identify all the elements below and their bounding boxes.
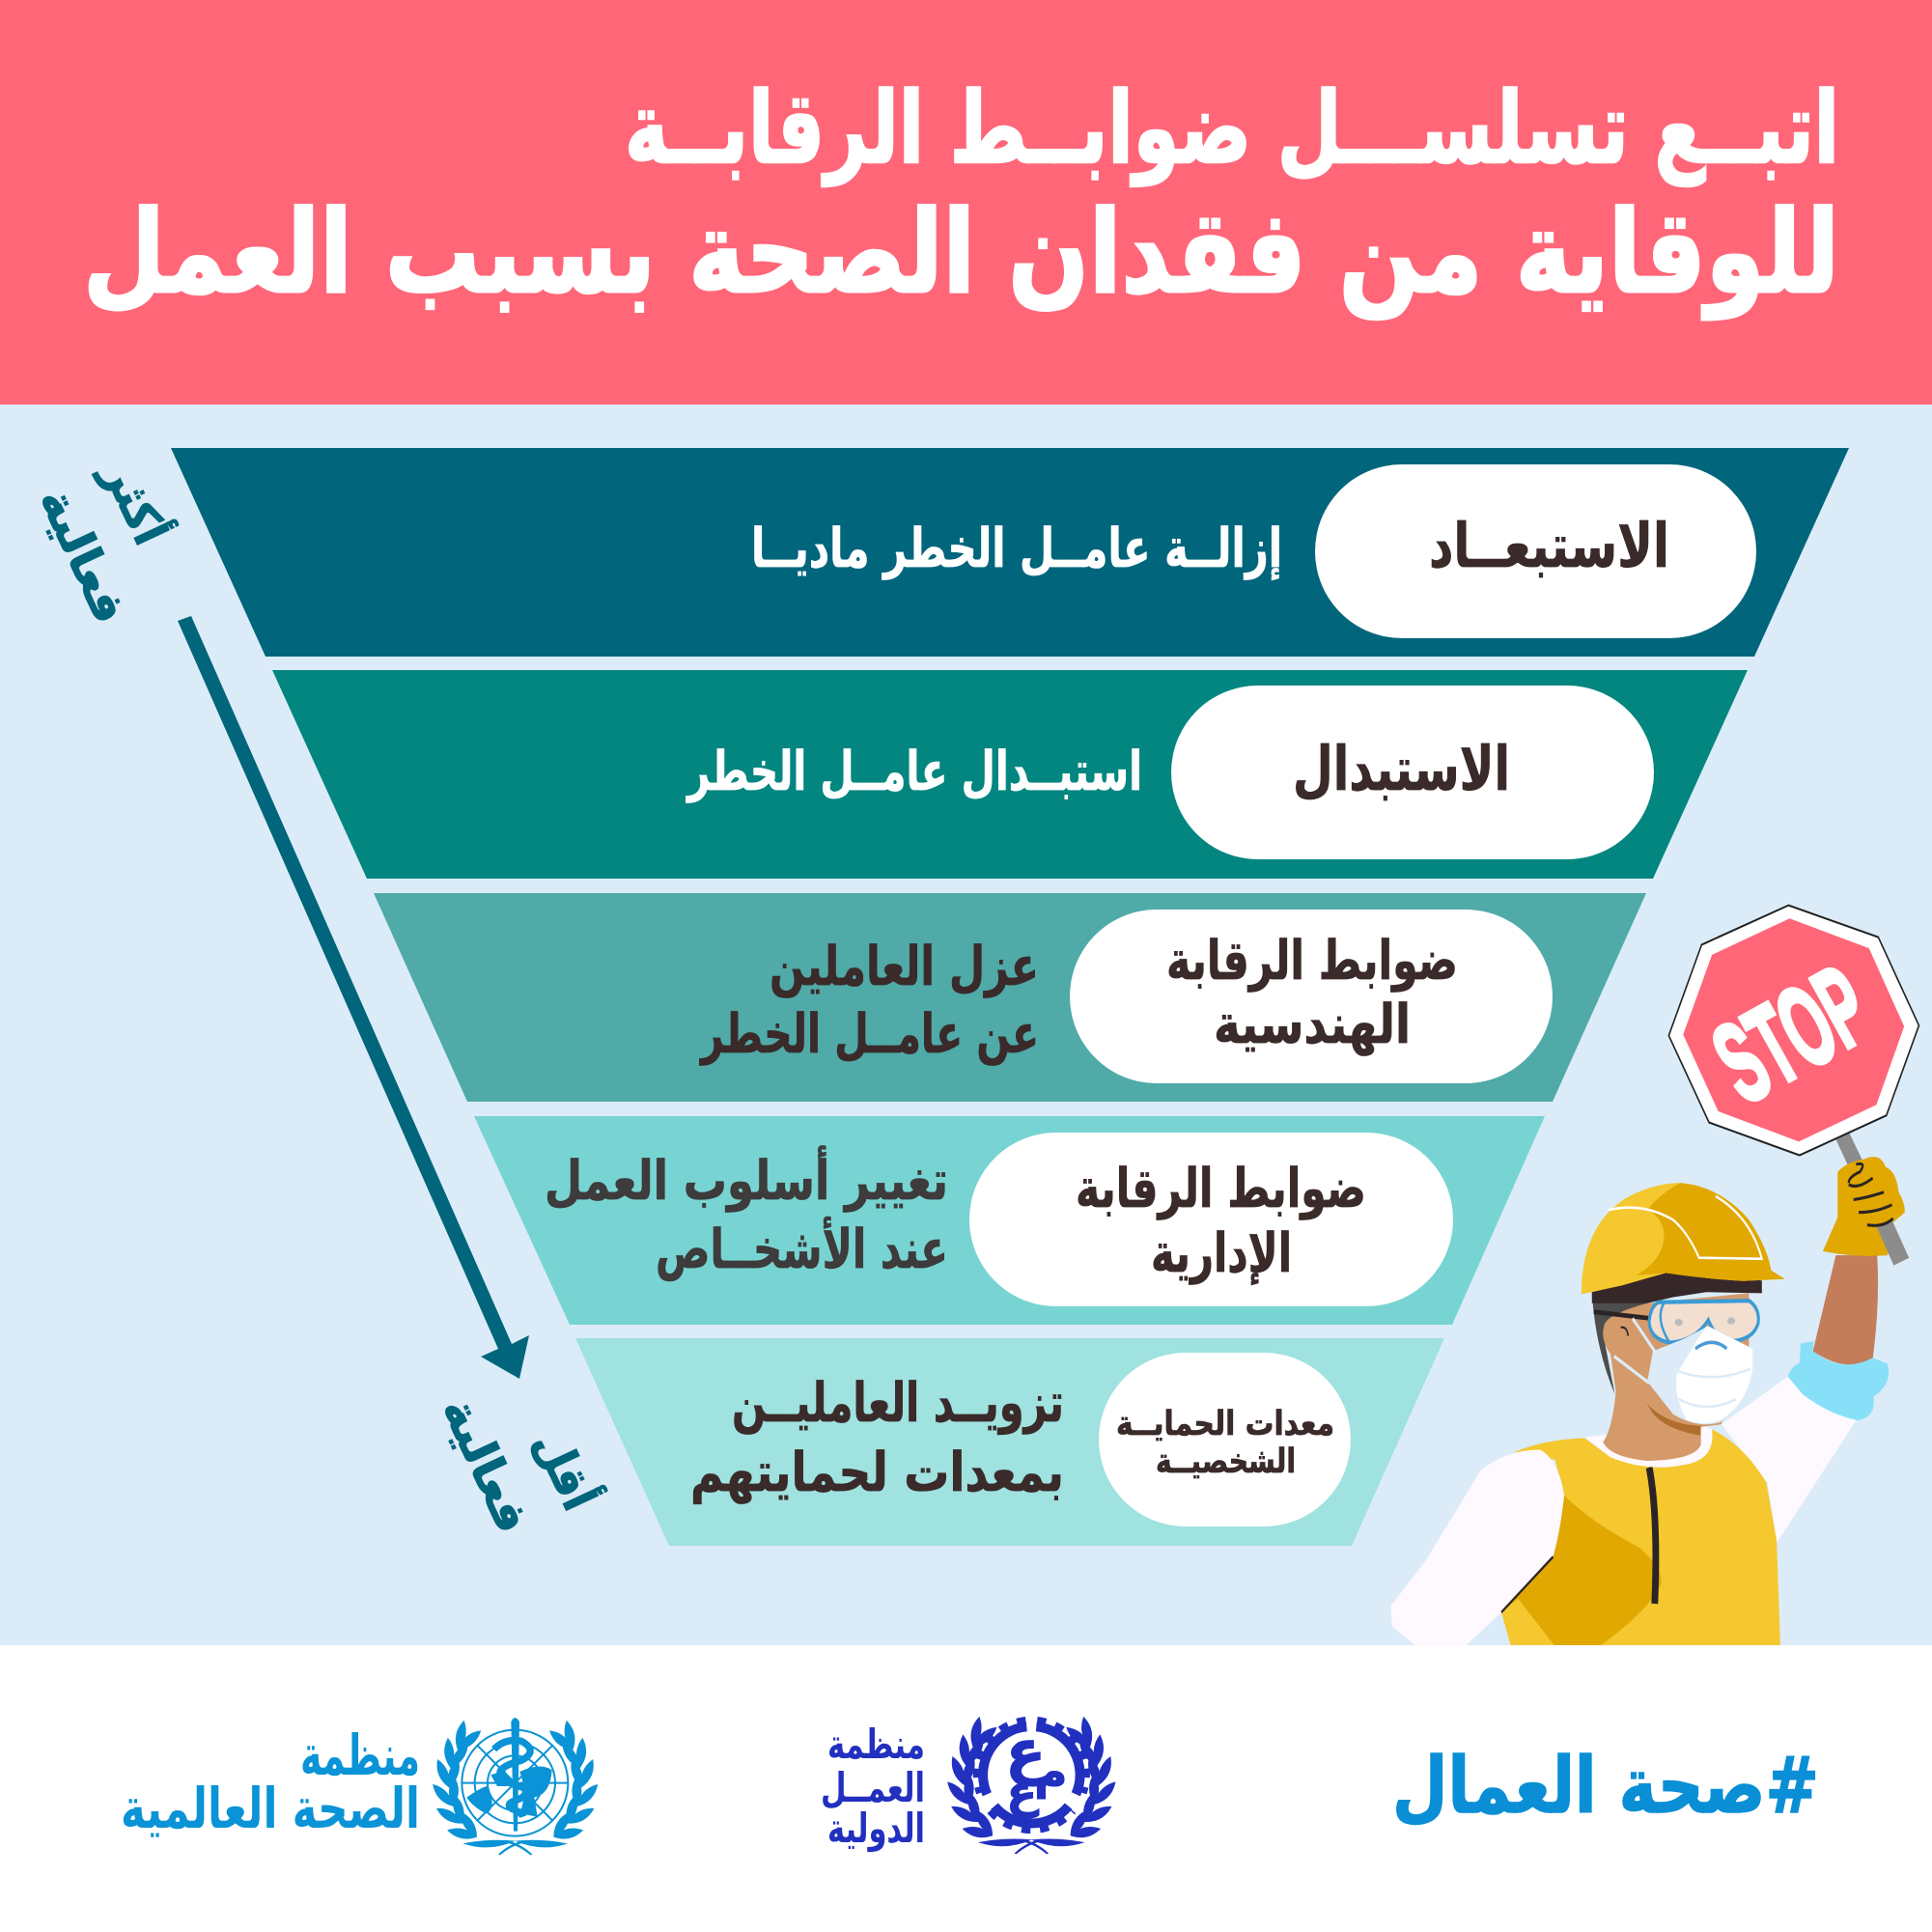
calligraphic letters <box>1005 1717 1067 1819</box>
panel: light blue background <box>0 405 1932 1645</box>
staff <box>511 1718 519 1832</box>
WHO line 1: منظمة <box>300 1722 420 1788</box>
band <box>272 670 1748 879</box>
label: less effective <box>431 1388 610 1541</box>
ILO text <box>821 1721 925 1853</box>
pill label: الاستبعــاد <box>1429 511 1669 581</box>
description: استبــدال عامــل الخطر <box>686 741 1142 803</box>
left sleeve <box>1390 1449 1564 1645</box>
mask <box>1614 1318 1752 1424</box>
word: more: أكثر <box>92 450 181 553</box>
arrow: effectiveness direction <box>178 616 529 1379</box>
icon: WHO emblem <box>429 1718 602 1855</box>
panel: title header <box>0 0 1932 405</box>
description line 1: تزويــد العامليــن <box>732 1372 1064 1435</box>
cuff <box>1788 1341 1889 1420</box>
wreath right <box>1023 1716 1119 1854</box>
band <box>575 1338 1444 1546</box>
vest shading <box>1501 1496 1662 1645</box>
helmet <box>1582 1183 1785 1294</box>
pill label line 2: الإدارية <box>1151 1222 1292 1285</box>
pill label: الاستبدال <box>1293 734 1510 804</box>
glove <box>1823 1157 1905 1256</box>
continents <box>466 1767 552 1817</box>
pill label line 1: ضوابط الرقابة <box>1166 930 1458 993</box>
raised arm <box>1813 1255 1878 1365</box>
ILO line 3: الدولية <box>827 1805 925 1853</box>
pill <box>1171 686 1654 859</box>
tier 1: elimination <box>171 448 1849 657</box>
description: إزالــة عامــل الخطر ماديــا <box>751 518 1282 580</box>
sign pole <box>1835 1132 1909 1266</box>
hair back <box>1592 1293 1647 1394</box>
footer hashtag: #صحة العمال <box>1392 1741 1819 1831</box>
sleeve seam <box>1501 1556 1554 1612</box>
word: effective: فعالية <box>431 1388 541 1541</box>
pill <box>969 1133 1453 1306</box>
wreath left <box>429 1720 523 1855</box>
pill <box>1070 910 1553 1083</box>
WHO text <box>121 1722 420 1841</box>
band <box>374 893 1646 1102</box>
description line 2: بمعدات لحمايتهم <box>690 1442 1064 1504</box>
goggle strap <box>1594 1312 1651 1318</box>
label: more effective <box>28 450 181 631</box>
collar <box>1584 1424 1713 1468</box>
serpent <box>494 1741 530 1817</box>
worker illustration holding stop sign <box>1390 906 1918 1645</box>
face and neck <box>1603 1293 1749 1461</box>
description line 2: عن عامــل الخطر <box>699 1003 1039 1066</box>
gear ring <box>976 1720 1087 1831</box>
ear <box>1621 1328 1628 1336</box>
wreath right <box>507 1720 602 1855</box>
WHO line 2: الصحة العالمية <box>121 1776 420 1841</box>
ILO line 2: العمــل <box>821 1764 925 1811</box>
pill label line 2: الشخصيــة <box>1156 1442 1296 1481</box>
goggles <box>1649 1301 1758 1343</box>
calligraphic letters: م <box>1034 1748 1067 1800</box>
pill label line 2: الهندسية <box>1214 994 1411 1056</box>
band <box>171 448 1849 657</box>
calligraphic letters: ع <box>1005 1717 1049 1786</box>
pole over glove <box>1876 1219 1909 1266</box>
pill label line 1: معدات الحمايــة <box>1116 1405 1334 1443</box>
pill <box>1099 1353 1351 1526</box>
right sleeve <box>1722 1377 1856 1543</box>
zipper <box>1649 1468 1656 1604</box>
calligraphic letters: ع <box>1006 1767 1039 1819</box>
tier 3: engineering controls <box>374 893 1646 1102</box>
pill label line 1: ضوابط الرقابة <box>1076 1158 1366 1220</box>
wreath left <box>944 1716 1040 1854</box>
hair fringe <box>1592 1273 1762 1303</box>
vest <box>1501 1430 1780 1645</box>
glove finger lines <box>1849 1163 1893 1225</box>
band <box>474 1116 1545 1325</box>
tier 2: substitution <box>272 670 1748 879</box>
word: effective: فعالية <box>28 479 138 631</box>
tier 5: personal protective equipment <box>575 1338 1444 1546</box>
pill <box>1315 464 1756 638</box>
icon: stop sign <box>1668 906 1918 1156</box>
description line 1: عزل العاملين <box>770 936 1039 998</box>
globe <box>462 1730 568 1836</box>
description line 2: عند الأشخــاص <box>656 1216 948 1281</box>
chin shadow <box>1646 1403 1701 1436</box>
tier 4: administrative controls <box>474 1116 1545 1325</box>
description line 1: تغيير أسلوب العمل <box>545 1145 948 1213</box>
icon: ILO emblem <box>944 1716 1119 1854</box>
word: less: أقل <box>523 1421 610 1519</box>
ILO line 1: منظمة <box>827 1721 925 1768</box>
